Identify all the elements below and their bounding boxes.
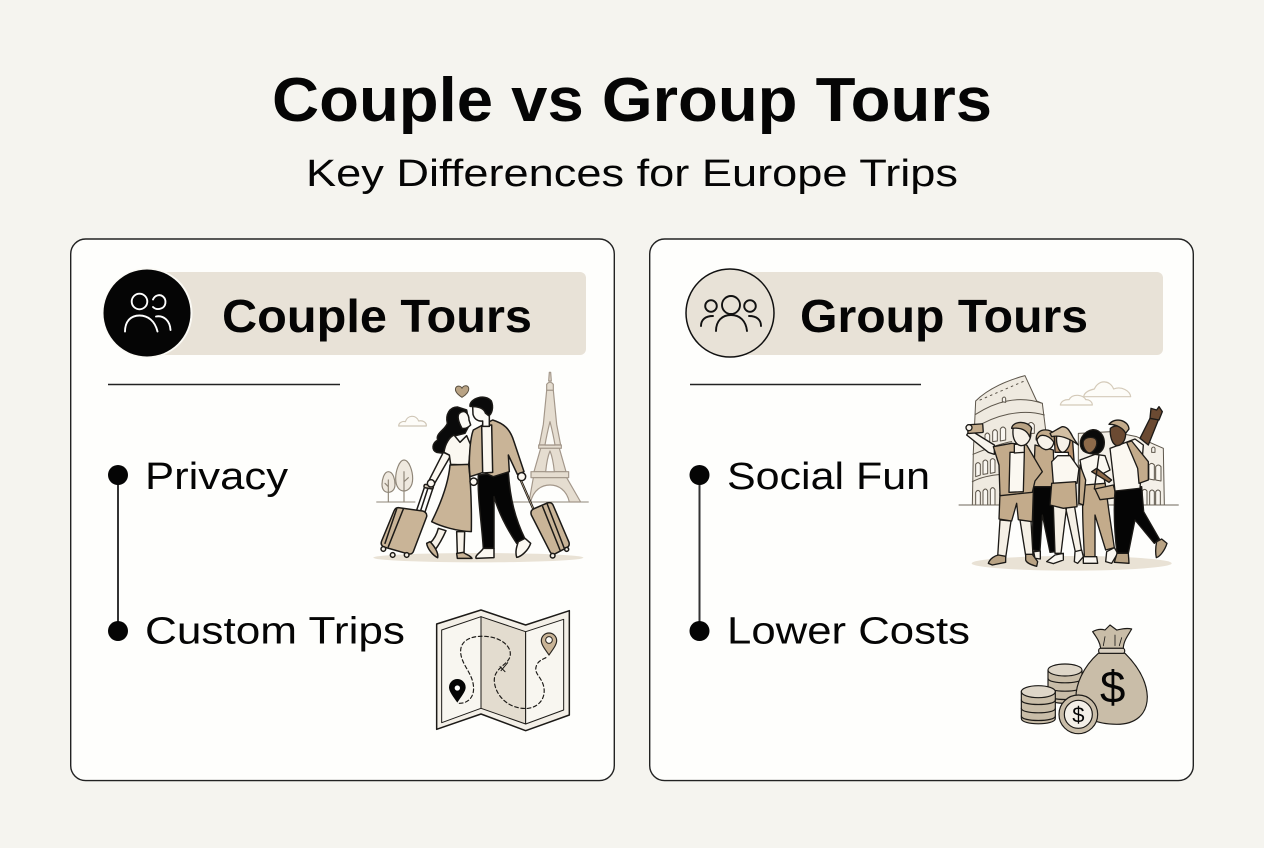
icon: black map pin	[449, 679, 466, 703]
heading: group tours: Group Tours	[800, 290, 1088, 342]
icon: colosseum	[972, 376, 1164, 505]
panel: couple tours	[71, 239, 1193, 781]
timeline: group benefits	[690, 465, 710, 641]
figure: woman with satchel	[1079, 430, 1118, 563]
icon: couple in black circle	[102, 268, 192, 358]
standing dollar coin: $	[1072, 702, 1084, 727]
figure: woman in sunhat	[1047, 427, 1083, 564]
icon: cloud	[399, 416, 426, 426]
coin stack back	[1048, 664, 1082, 703]
text: custom trips: Custom Trips	[145, 610, 405, 652]
icon: money bag and coins	[1021, 625, 1147, 734]
left suitcase	[381, 484, 434, 557]
title: Couple vs Group Tours	[272, 66, 992, 135]
header band: couple tours	[150, 272, 586, 355]
money bag	[1076, 653, 1147, 724]
text: privacy: Privacy	[145, 456, 288, 498]
icon: group in outlined circle	[686, 269, 774, 357]
illustration: friends taking a selfie at the Colosseum	[959, 376, 1178, 571]
icon: trees	[382, 460, 413, 502]
illustration: couple with luggage at the Eiffel Tower	[373, 372, 588, 562]
figure: man waving	[1109, 407, 1167, 563]
text: lower costs: Lower Costs	[727, 610, 970, 652]
icon: clouds	[1060, 382, 1131, 405]
figure: man taking selfie	[966, 422, 1042, 566]
coin stack front	[1021, 686, 1055, 724]
header band: group tours	[730, 272, 1163, 355]
icon: heart	[455, 386, 469, 397]
timeline: couple benefits	[108, 465, 128, 641]
dollar sign on bag: $	[1100, 662, 1125, 713]
subtitle: Key Differences for Europe Trips	[306, 153, 958, 195]
icon: folded map with route	[437, 610, 569, 731]
icon: tan map pin	[541, 633, 557, 655]
right suitcase	[521, 480, 569, 558]
panel: group tours	[650, 239, 1193, 781]
text: social fun: Social Fun	[727, 456, 930, 498]
figure: woman	[427, 407, 472, 558]
figure: man	[469, 397, 531, 558]
figure: friend in tan top and black trousers	[1032, 430, 1056, 559]
heading: couple tours: Couple Tours	[222, 290, 532, 342]
icon: eiffel tower	[529, 372, 581, 502]
